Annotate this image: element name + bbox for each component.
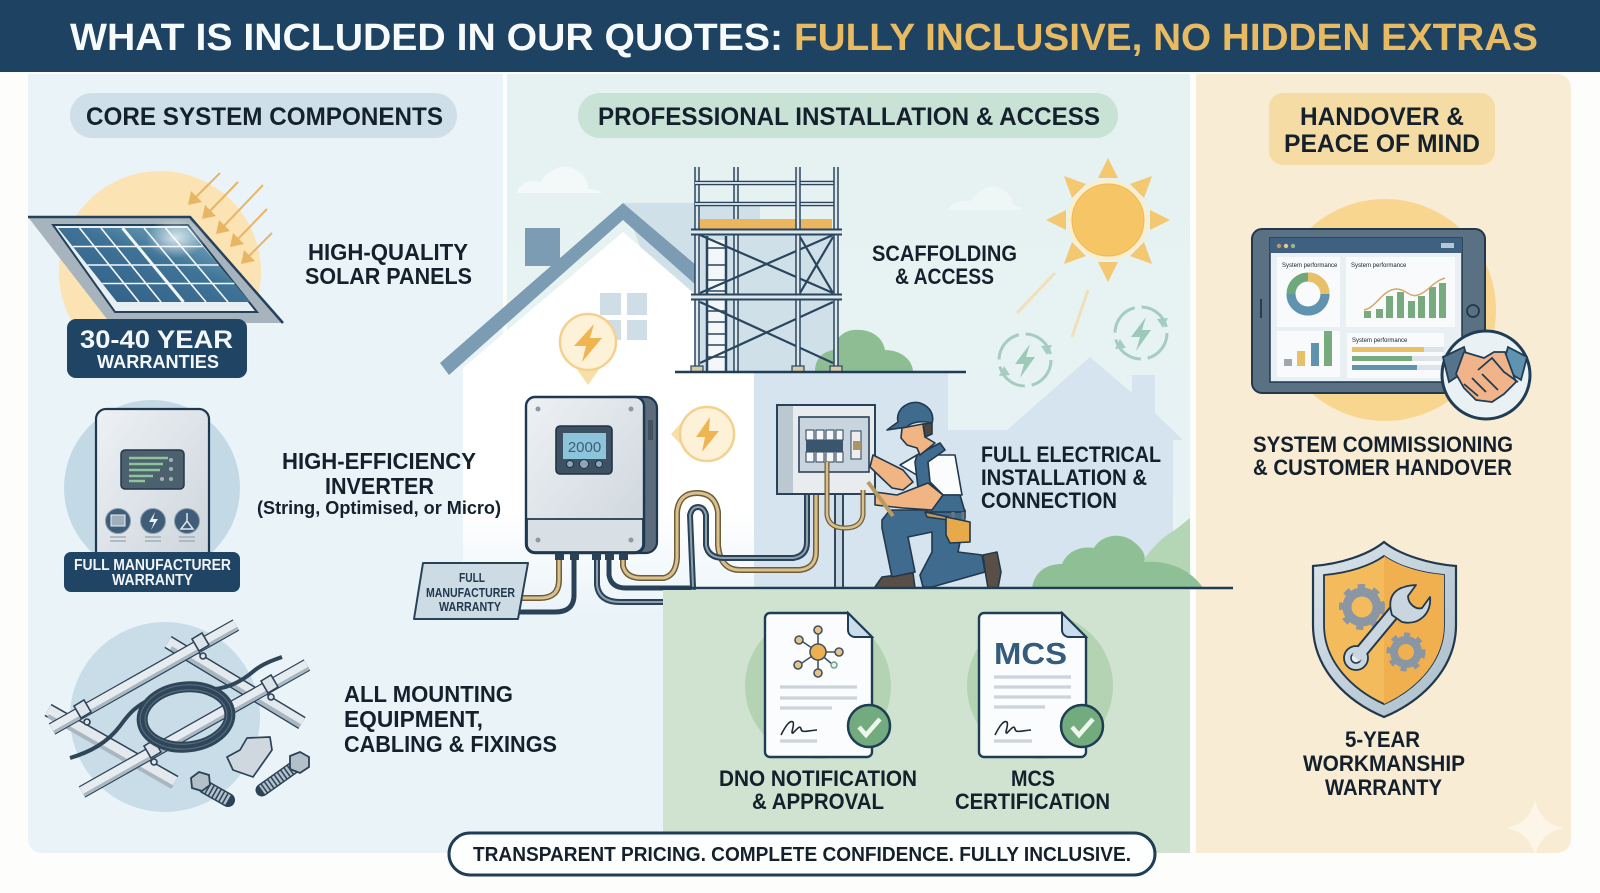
label: commissioning xyxy=(1253,432,1513,480)
illustration: background building xyxy=(732,357,1183,588)
label: DNO notification: DNO NOTIFICATION xyxy=(719,766,917,791)
icon: DNO document xyxy=(745,613,891,759)
icon: house window xyxy=(600,293,647,340)
panel: handover and peace of mind xyxy=(1196,74,1571,856)
label: solar panels: SOLAR PANELS xyxy=(305,263,472,289)
illustration: main house wall xyxy=(463,232,754,620)
illustration: upper ground line xyxy=(675,371,966,373)
label: MCS certification: CERTIFICATION xyxy=(955,789,1110,814)
label: electrical installation: CONNECTION xyxy=(981,488,1117,513)
illustration: cables xyxy=(518,493,816,612)
icon: bush near scaffold xyxy=(815,330,913,372)
label: scaffolding: & ACCESS xyxy=(895,264,994,289)
footer strapline: TRANSPARENT PRICING. COMPLETE CONFIDENCE. FULLY INCLUSIVE. xyxy=(473,844,1131,866)
badge: 30-40 year warranties xyxy=(67,319,247,378)
label: MCS certification xyxy=(955,766,1110,814)
label: mounting equipment: ALL MOUNTING xyxy=(344,681,513,707)
heading: handover: PEACE OF MIND xyxy=(1284,130,1480,158)
label: electrical installation: INSTALLATION & xyxy=(981,465,1147,490)
icon: electrician kneeling xyxy=(868,402,1001,588)
icon: electrical consumer unit xyxy=(777,405,875,588)
icon: sun xyxy=(1017,158,1170,337)
icon: solar panel with sun rays xyxy=(28,171,283,373)
label: scaffolding xyxy=(872,241,1017,289)
label: inverter xyxy=(257,448,501,518)
tag: full manufacturer warranty: WARRANTY xyxy=(439,600,502,614)
tag: full manufacturer warranty: MANUFACTURER xyxy=(426,586,515,600)
label: electrical installation: FULL ELECTRICAL xyxy=(981,442,1161,467)
heading: professional installation: PROFESSIONAL INSTALLATION & ACCESS xyxy=(598,103,1100,131)
illustration: house roof and chimney xyxy=(440,203,697,375)
label: DNO notification: & APPROVAL xyxy=(752,789,884,814)
icon: MCS document: MCS xyxy=(994,636,1067,671)
heading: professional installation xyxy=(578,93,1118,138)
header banner xyxy=(0,0,1600,72)
label: commissioning: SYSTEM COMMISSIONING xyxy=(1253,432,1513,457)
label: solar panels xyxy=(305,239,472,289)
badge: full manufacturer warranty: FULL MANUFACTURER xyxy=(74,557,231,574)
heading: core system components xyxy=(70,93,457,138)
icon: bushes on ground right xyxy=(1032,518,1203,588)
panel: certification area xyxy=(663,590,1190,853)
label: workmanship warranty: 5-YEAR xyxy=(1345,727,1420,752)
icon: inverter with display: 2000 xyxy=(568,439,601,456)
icon: mounting rails, cable and fixings xyxy=(48,622,309,812)
icon: inverter unit xyxy=(64,400,240,576)
label: workmanship warranty: WARRANTY xyxy=(1325,775,1442,800)
panel content: core system components xyxy=(28,93,557,812)
icon: sparkle xyxy=(1507,800,1563,856)
badge: full manufacturer warranty xyxy=(64,552,240,592)
heading: handover xyxy=(1269,93,1495,165)
label: MCS certification: MCS xyxy=(1011,766,1055,791)
label: commissioning: & CUSTOMER HANDOVER xyxy=(1253,455,1512,480)
label: inverter: HIGH-EFFICIENCY xyxy=(282,448,476,474)
label: inverter: (String, Optimised, or Micro) xyxy=(257,498,501,518)
icon: lightning badge near inverter xyxy=(671,407,734,461)
badge: 30-40 year warranties: WARRANTIES xyxy=(97,352,219,372)
panel background: core system components xyxy=(28,74,503,853)
icon: inverter with display xyxy=(526,397,657,560)
label: scaffolding: SCAFFOLDING xyxy=(872,241,1017,266)
icon: handshake xyxy=(1442,331,1530,419)
label: mounting equipment: EQUIPMENT, xyxy=(344,706,483,732)
illustration: lower ground line xyxy=(660,587,1233,589)
title gold: FULLY INCLUSIVE, NO HIDDEN EXTRAS xyxy=(794,17,1538,59)
panel: professional installation and access xyxy=(414,74,1233,853)
icon: tablet dashboard: System performance xyxy=(1282,263,1338,269)
illustration: scaffolding tower xyxy=(691,167,842,372)
icon: lightning badge near house xyxy=(560,314,616,385)
badge: full manufacturer warranty: WARRANTY xyxy=(112,572,194,589)
icon: MCS document xyxy=(967,613,1113,759)
illustration: shaded gable behind scaffolding xyxy=(623,203,838,372)
heading: core system components: CORE SYSTEM COMPONENTS xyxy=(86,103,443,131)
icon: clouds xyxy=(517,167,1023,210)
label: workmanship warranty xyxy=(1303,727,1465,800)
heading: handover: HANDOVER & xyxy=(1300,103,1464,131)
icon: tablet dashboard xyxy=(1252,199,1496,421)
label: inverter: INVERTER xyxy=(325,473,434,499)
tag: full manufacturer warranty: FULL xyxy=(459,571,485,585)
icon: tablet dashboard: System performance xyxy=(1351,263,1407,269)
icon: workmanship shield xyxy=(1313,542,1456,717)
label: solar panels: HIGH-QUALITY xyxy=(308,239,468,265)
badge: 30-40 year warranties: 30-40 YEAR xyxy=(80,326,233,354)
icon: renewable energy symbols xyxy=(999,307,1168,386)
label: DNO notification xyxy=(719,766,917,814)
footer strapline xyxy=(449,833,1155,875)
title white: WHAT IS INCLUDED IN OUR QUOTES: xyxy=(70,17,783,59)
icon: tablet dashboard: System performance xyxy=(1352,338,1408,344)
label: workmanship warranty: WORKMANSHIP xyxy=(1303,751,1465,776)
label: mounting equipment: CABLING & FIXINGS xyxy=(344,731,557,757)
label: electrical installation xyxy=(981,442,1161,513)
tag: full manufacturer warranty xyxy=(414,563,528,619)
label: mounting equipment xyxy=(344,681,557,757)
